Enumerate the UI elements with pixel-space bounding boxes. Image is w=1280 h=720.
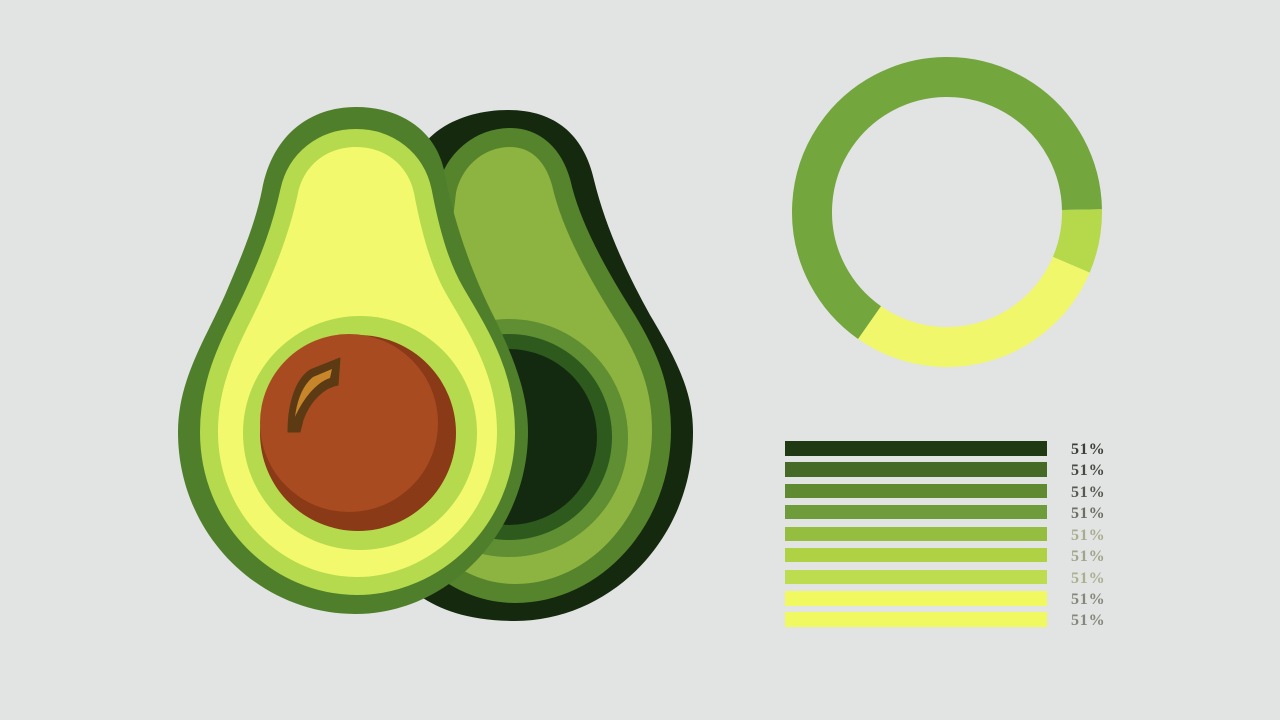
- pit ring: [243, 316, 477, 550]
- front avocado half: [178, 107, 528, 614]
- seed: [260, 334, 456, 531]
- seed highlight: [288, 358, 340, 432]
- bar 2: [785, 462, 1105, 479]
- bar 1: [785, 441, 1105, 458]
- back avocado half: [380, 110, 693, 621]
- bar 2: 51%: [1071, 462, 1105, 479]
- donut segment: green: [812, 77, 1082, 323]
- donut segment: yellow: [870, 265, 1071, 347]
- bar 4: 51%: [1071, 505, 1105, 522]
- legend bars: [785, 441, 1105, 629]
- bar 1: 51%: [1071, 441, 1105, 458]
- illustration: avocado pair: [178, 107, 693, 621]
- bar 5: 51%: [1071, 527, 1105, 544]
- bar 8: [785, 591, 1105, 608]
- bar 7: 51%: [1071, 570, 1105, 587]
- donut chart: [812, 77, 1082, 347]
- donut segment: lime: [1071, 210, 1082, 265]
- bar 5: [785, 527, 1105, 544]
- bar 8: 51%: [1071, 591, 1105, 608]
- bar 9: [785, 612, 1105, 629]
- empty pit cavity: [390, 319, 628, 557]
- bar 4: [785, 505, 1105, 522]
- bar 9: 51%: [1071, 612, 1105, 629]
- bar 7: [785, 570, 1105, 587]
- bar 6: 51%: [1071, 548, 1105, 565]
- bar 6: [785, 548, 1105, 565]
- bar 3: 51%: [1071, 484, 1105, 501]
- bar 3: [785, 484, 1105, 501]
